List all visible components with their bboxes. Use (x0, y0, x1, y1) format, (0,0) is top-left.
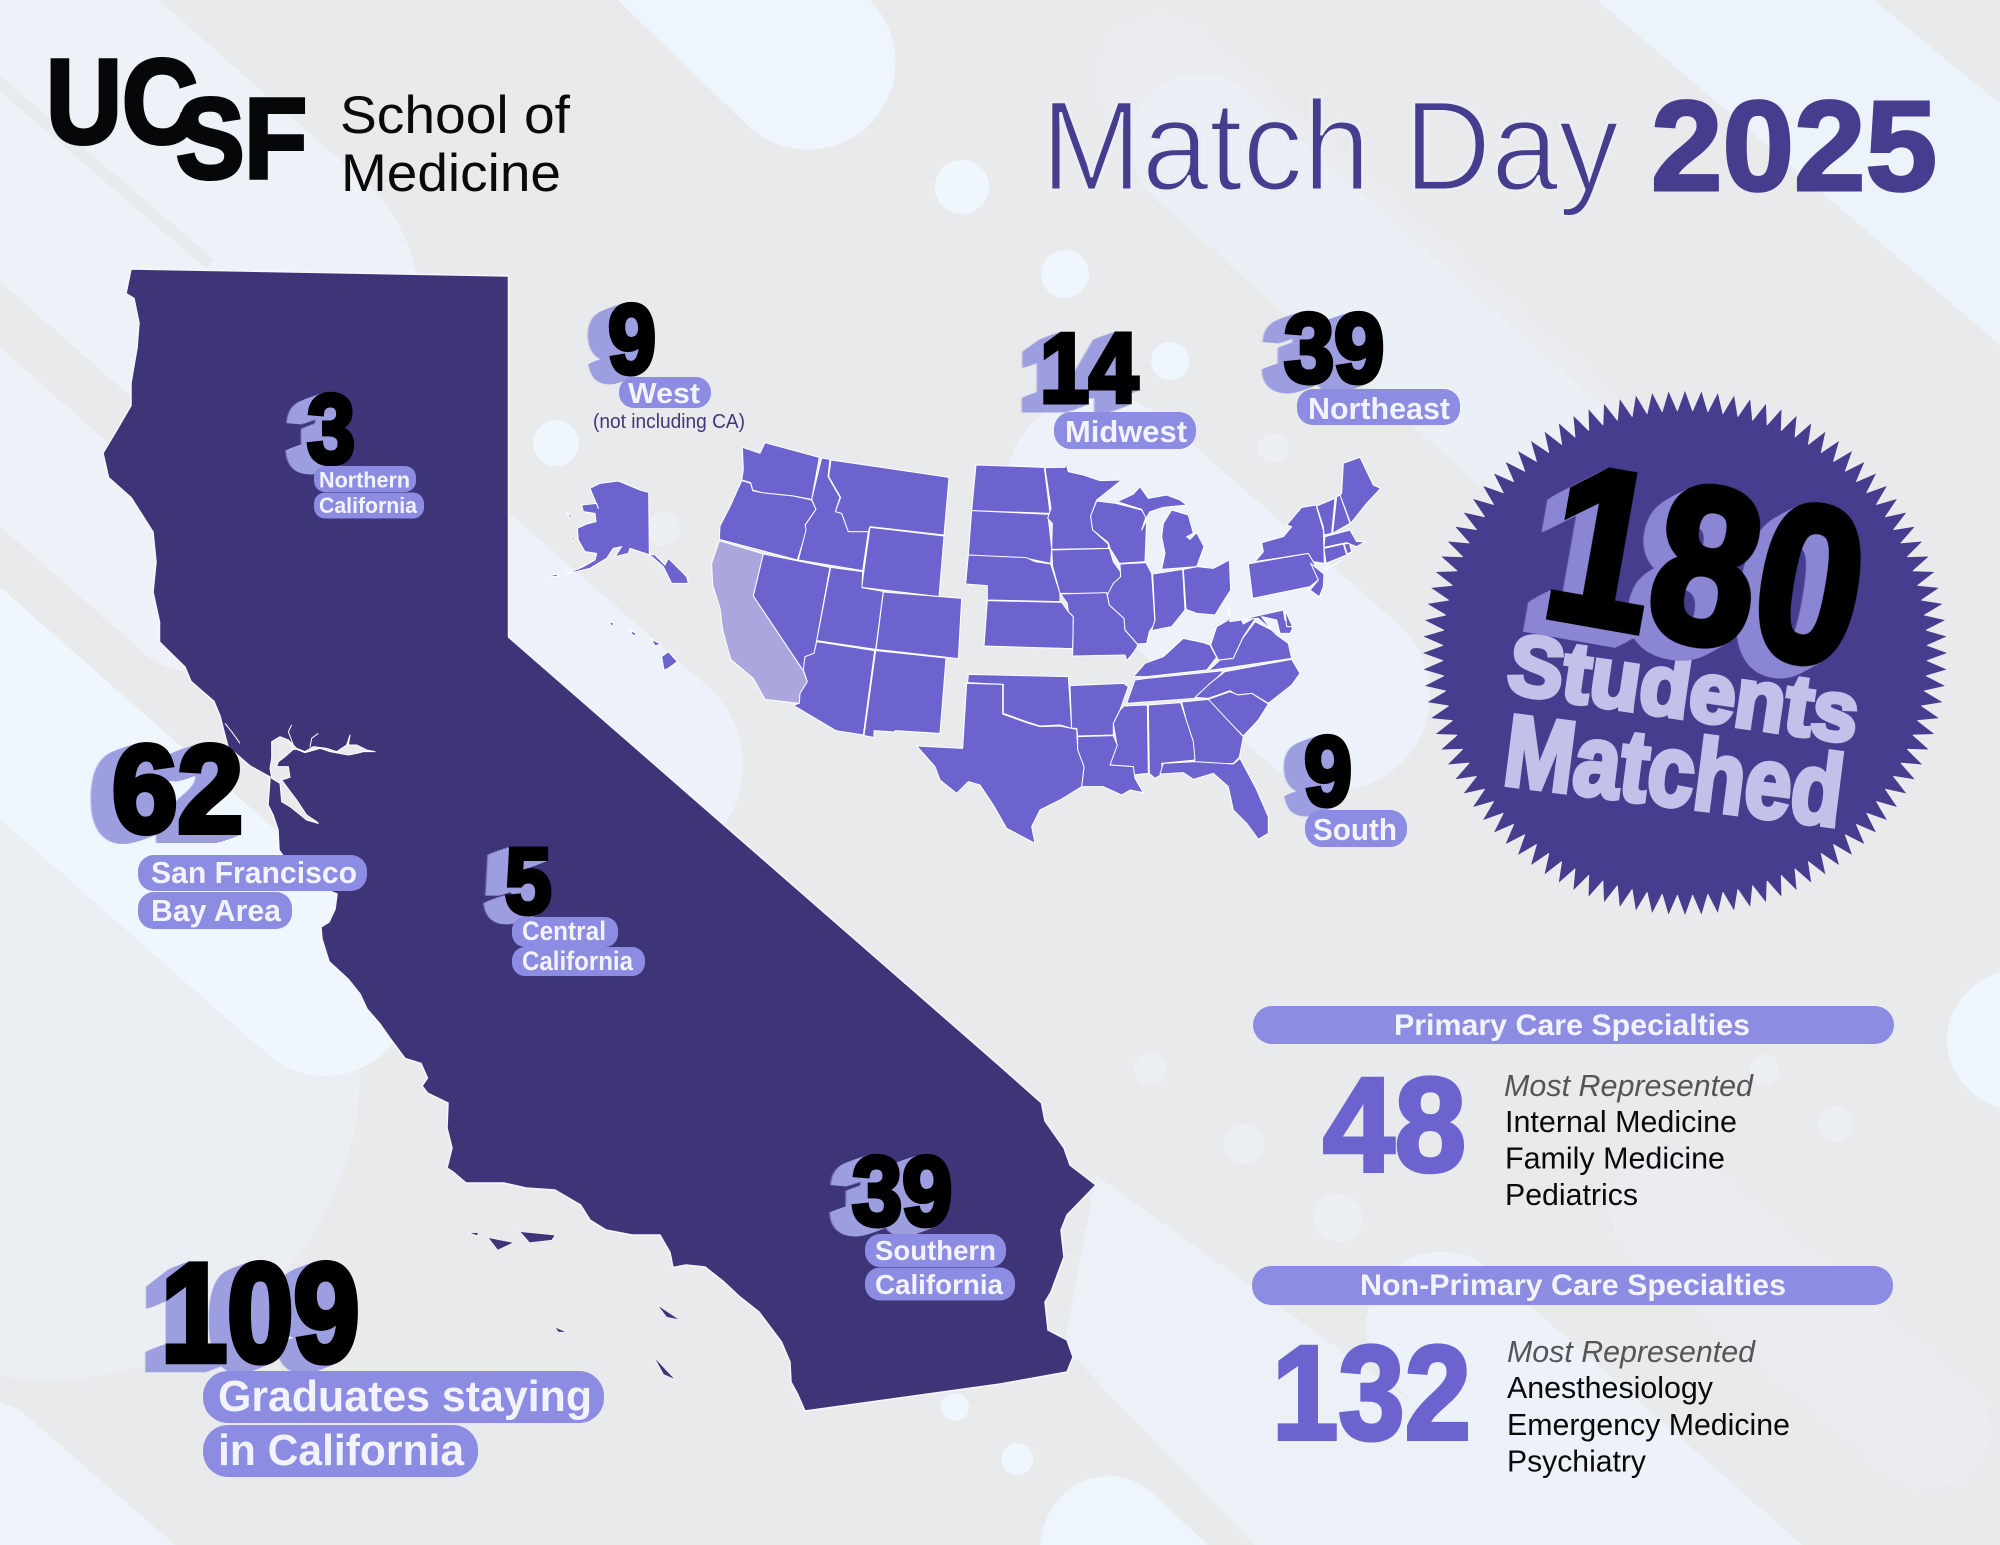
map: United States (548, 443, 1381, 843)
number: Northeast 39: 39 (1284, 293, 1384, 403)
list: most represented primary care: Family Medicine (1505, 1140, 1725, 1176)
starburst badge (1406, 374, 1964, 932)
heading bar: non-primary care: Non-Primary Care Specialties (1360, 1269, 1786, 1302)
San Francisco Bay and Delta (225, 723, 375, 823)
title light part: Match Day (1041, 75, 1619, 218)
panel: primary care specialties (1253, 1006, 1894, 1212)
list: most represented non-primary care: Emergency Medicine (1507, 1407, 1790, 1442)
list: most represented non-primary care: Psychiatry (1507, 1444, 1646, 1478)
label: Central California: California (522, 946, 634, 976)
badge text: Matched: Matched (1498, 694, 1850, 848)
panel: non-primary care specialties (1252, 1266, 1893, 1478)
logo wordmark SF: SF (176, 76, 307, 203)
logo: UCSF School of Medicine (46, 35, 570, 203)
label: West: West (628, 378, 700, 410)
list: most represented non-primary care: Most Represented (1507, 1334, 1757, 1369)
note: not including CA: (not including CA) (593, 411, 745, 433)
label: Midwest: Midwest (1065, 414, 1187, 449)
label: Graduates staying in California: Graduates staying (218, 1372, 592, 1421)
number: Bay Area 62: 62 (112, 721, 243, 859)
number: West 9: 9 (608, 284, 656, 394)
map: California large (103, 269, 1096, 1411)
label: Southern California (865, 1234, 1015, 1300)
number: Central California 5: 5 (505, 829, 552, 933)
central and eastern states (917, 457, 1381, 843)
number: South 9: 9 (1304, 716, 1352, 826)
label: Graduates staying in California (203, 1371, 604, 1477)
list: most represented non-primary care: Anesthesiology (1507, 1370, 1713, 1405)
number: Midwest 14: 14 (1040, 313, 1138, 423)
school name: Medicine (341, 144, 561, 203)
heading bar: primary care: Primary Care Specialties (1394, 1009, 1750, 1042)
Channel Islands (469, 1232, 679, 1379)
label: Southern California: Southern (875, 1235, 996, 1266)
label: Graduates staying in California: in California (218, 1426, 465, 1475)
number: primary care 48: 48 (1323, 1051, 1466, 1200)
number: Northern California 3: 3 (307, 374, 355, 484)
label: Central California (512, 916, 645, 976)
badge number: 180: 180 (1530, 417, 1883, 716)
logo wordmark UC: UC (46, 35, 198, 169)
label: San Francisco Bay Area: Bay Area (151, 893, 282, 928)
label: South: South (1313, 812, 1397, 847)
label: Central California: Central (522, 916, 606, 946)
title year: 2025 (1651, 75, 1937, 218)
list: most represented primary care: Internal Medicine (1505, 1104, 1737, 1139)
heading bar: non-primary care (1252, 1266, 1893, 1305)
number: graduates staying 109: 109 (161, 1234, 360, 1390)
list: most represented primary care: Pediatrics (1505, 1177, 1638, 1212)
label: San Francisco Bay Area: San Francisco (151, 855, 357, 890)
title (1041, 75, 1937, 218)
school name: School of (340, 86, 570, 145)
list: most represented non-primary care (1507, 1334, 1790, 1478)
western states and Alaska, Hawaii (548, 443, 962, 737)
badge text: Students: Students (1502, 617, 1865, 762)
label: Northern California: Northern (319, 468, 410, 492)
number: Southern California 39: 39 (852, 1136, 952, 1246)
list: most represented primary care (1504, 1068, 1755, 1212)
list: most represented primary care: Most Represented (1504, 1068, 1755, 1103)
label: Northern California (314, 466, 424, 518)
number: non-primary care 132: 132 (1272, 1319, 1471, 1468)
label: Southern California: California (875, 1269, 1003, 1300)
label: San Francisco Bay Area (138, 855, 367, 929)
label: Northern California: California (319, 493, 418, 518)
heading bar: primary care (1253, 1006, 1894, 1044)
label: Northeast: Northeast (1308, 391, 1450, 426)
